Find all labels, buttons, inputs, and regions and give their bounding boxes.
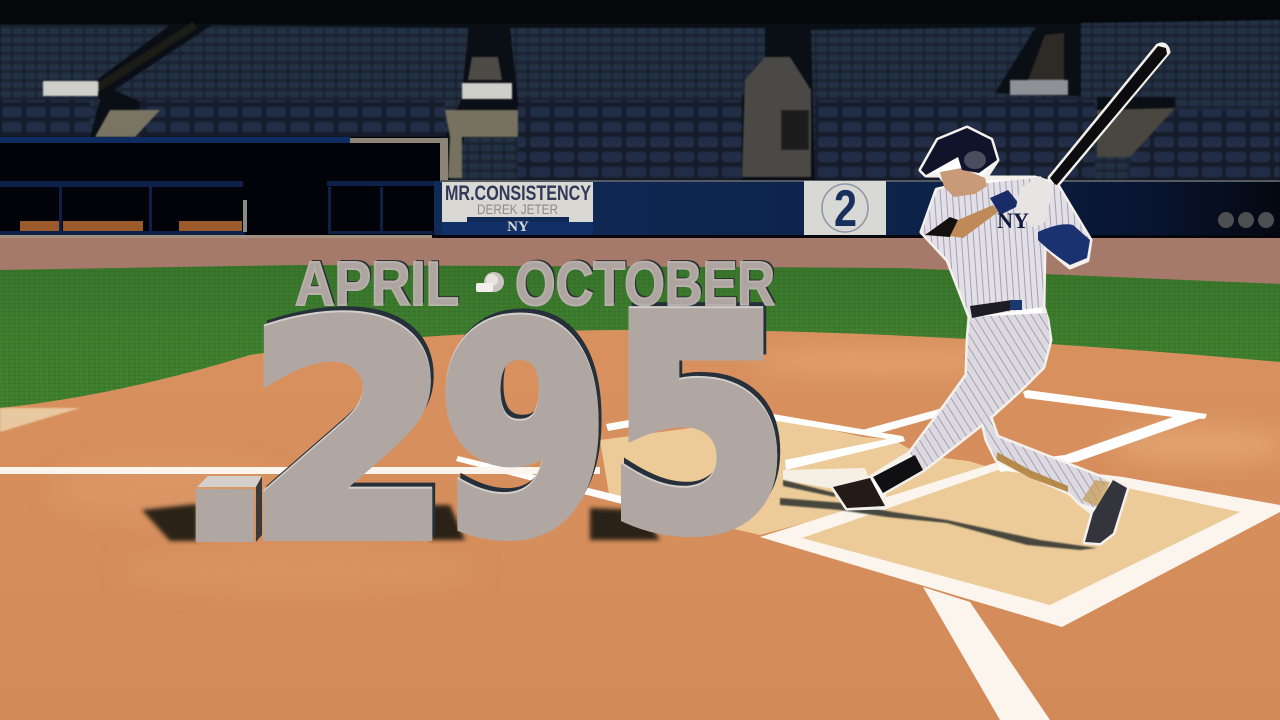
outfield wall bbox=[434, 181, 1280, 238]
extruded back of digits bbox=[249, 250, 793, 599]
lit bevel of digits: 9 bbox=[438, 265, 609, 596]
player outline bbox=[833, 45, 1168, 543]
cleat left bbox=[833, 478, 885, 508]
helmet bbox=[921, 128, 997, 175]
heading face bbox=[295, 250, 775, 319]
jersey logo: NY bbox=[997, 208, 1029, 233]
icon: baseball dash bbox=[476, 272, 504, 292]
heading depth: OCTOBER bbox=[517, 248, 777, 317]
banner: Mr. Consistency: NY bbox=[507, 219, 529, 235]
seating sections bbox=[0, 20, 1280, 180]
extruded back of digits: 9 bbox=[441, 261, 612, 592]
dugout bbox=[0, 137, 448, 238]
bat bbox=[1050, 46, 1167, 186]
heading: April - October bbox=[295, 248, 777, 319]
lit bevel of digits bbox=[246, 254, 790, 603]
number shadows bbox=[142, 504, 660, 541]
batter's box left bbox=[456, 408, 1000, 535]
digit faces: 5 bbox=[606, 256, 790, 596]
heading face: OCTOBER bbox=[515, 250, 775, 319]
scoreboard dots bbox=[1218, 212, 1274, 228]
dirt highlights bbox=[50, 352, 1280, 594]
pant leg dirt stain bbox=[997, 452, 1068, 492]
banner: Mr. Consistency: DEREK JETER bbox=[477, 201, 558, 217]
digit faces bbox=[246, 256, 790, 605]
digit faces: 9 bbox=[438, 267, 609, 598]
banner: Mr. Consistency bbox=[442, 182, 593, 235]
legs bbox=[910, 313, 1107, 508]
extruded back of digits: 2 bbox=[249, 259, 455, 599]
batting gloves bbox=[1015, 176, 1054, 228]
banner: Mr. Consistency: MR.CONSISTENCY bbox=[445, 182, 591, 205]
concrete aisles and signs bbox=[43, 25, 1175, 178]
foul line left bbox=[0, 467, 600, 474]
infield dirt bbox=[0, 330, 1280, 720]
elbow guard bbox=[1038, 224, 1090, 265]
socks bbox=[873, 455, 923, 493]
big stat .295 bbox=[162, 250, 793, 609]
heading depth: APRIL bbox=[297, 248, 461, 317]
lit bevel of digits: 2 bbox=[246, 263, 452, 603]
torso bbox=[922, 178, 1090, 317]
extruded back of digits: 5 bbox=[609, 250, 793, 590]
player shadow bbox=[780, 480, 1097, 550]
light grass edge wedge bbox=[0, 408, 80, 432]
retired number 2 sign bbox=[804, 180, 886, 238]
belt bbox=[970, 300, 1022, 318]
warning track bbox=[0, 238, 1280, 284]
face bbox=[940, 168, 987, 197]
lit bevel of digits: 5 bbox=[606, 254, 790, 594]
foul line right bbox=[923, 587, 1050, 720]
front arm and sleeve bbox=[925, 190, 1020, 238]
outfield grass bbox=[0, 265, 1280, 412]
heading face: APRIL bbox=[295, 250, 459, 319]
decimal point: . bbox=[162, 283, 288, 609]
player: batter mid-swing bbox=[833, 45, 1168, 543]
stadium background bbox=[0, 0, 1280, 240]
batter's box right bbox=[760, 390, 1280, 627]
cleat right bbox=[1085, 480, 1127, 543]
digit faces: 2 bbox=[246, 265, 452, 605]
heading depth bbox=[297, 248, 777, 317]
retired number 2 sign: 2 bbox=[834, 180, 857, 238]
